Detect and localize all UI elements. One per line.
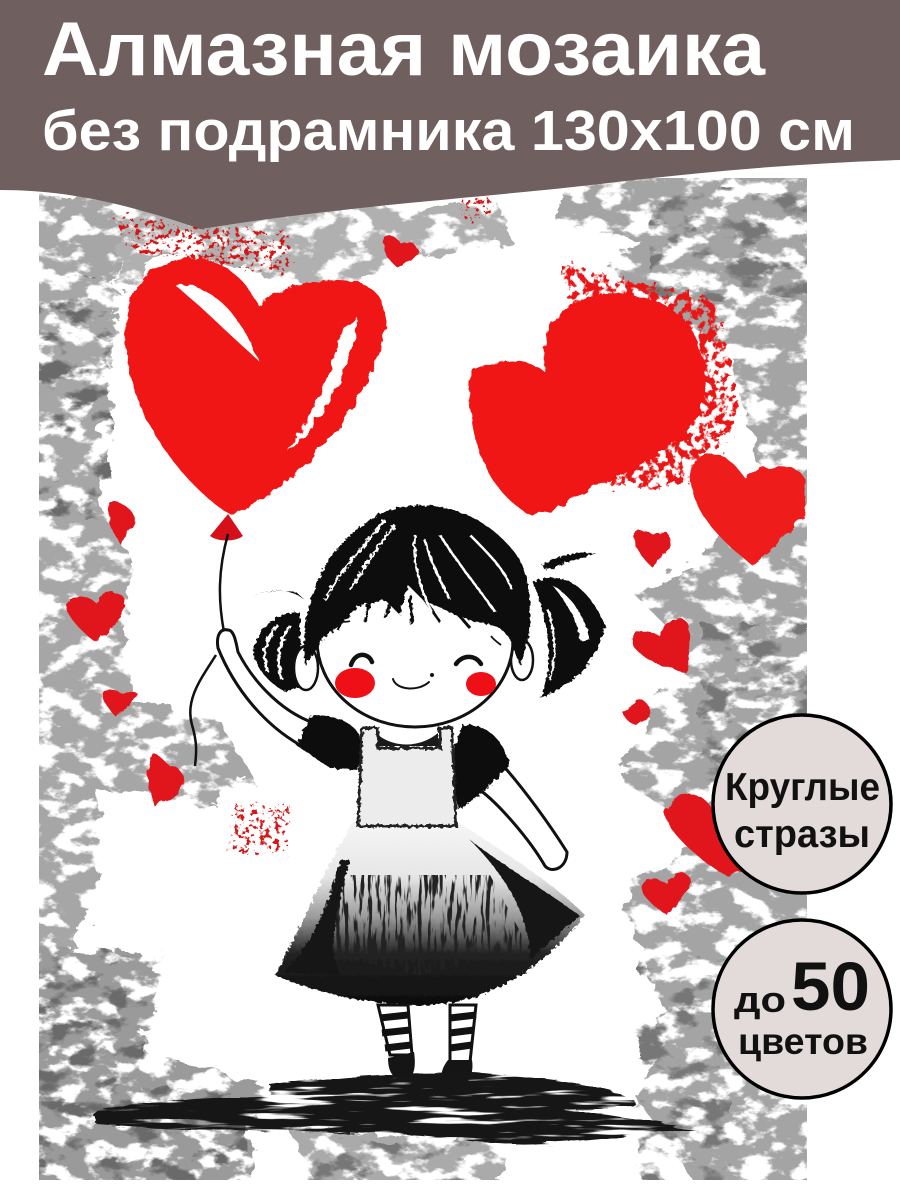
hair [304, 505, 530, 665]
title: Алмазная мозаика [42, 7, 766, 92]
heart lower right large [665, 795, 745, 876]
face [317, 553, 513, 727]
girl illustration [217, 505, 605, 1088]
heart right 2 [632, 619, 690, 674]
heart lower right small [641, 874, 691, 914]
legs [378, 1005, 476, 1088]
badge: up to 50 colours: цветов [738, 1021, 868, 1062]
badge: round rhinestones: Круглые [725, 766, 880, 809]
subtitle: без подрамника 130х100 см [42, 99, 855, 163]
small hearts [66, 236, 745, 914]
large red heart balloon [125, 258, 386, 540]
right pigtail [533, 553, 605, 698]
balloon string [190, 534, 228, 766]
heart left 1 [109, 502, 136, 544]
heart left 2 [66, 592, 125, 643]
left arm [217, 630, 320, 745]
heart small left 4 [102, 690, 137, 716]
red heart right [690, 454, 805, 565]
ground shadow [96, 1073, 695, 1144]
heart right 1 [634, 530, 670, 567]
badge: up to 50 colours: 50 [791, 948, 870, 1025]
heart right 3 [623, 700, 650, 726]
badge: round rhinestones: стразы [734, 813, 870, 856]
header banner [0, 0, 900, 229]
badge: up to 50 colours: до [734, 979, 786, 1020]
left pigtail [253, 591, 305, 692]
eyes and brows [351, 655, 481, 665]
bib [358, 728, 456, 826]
red painted heart blob [469, 265, 740, 514]
badge: up to 50 colours [713, 920, 891, 1098]
heart left 3 [148, 752, 184, 807]
dress skirt [275, 822, 585, 1005]
right arm [480, 762, 567, 870]
heart top [383, 236, 418, 268]
ears [294, 640, 533, 690]
sleeves [296, 715, 510, 810]
red paint splatter [110, 195, 495, 855]
mouth [393, 679, 429, 688]
painting background [30, 170, 820, 1190]
badge: round rhinestones [713, 715, 891, 893]
cheeks [335, 668, 496, 698]
